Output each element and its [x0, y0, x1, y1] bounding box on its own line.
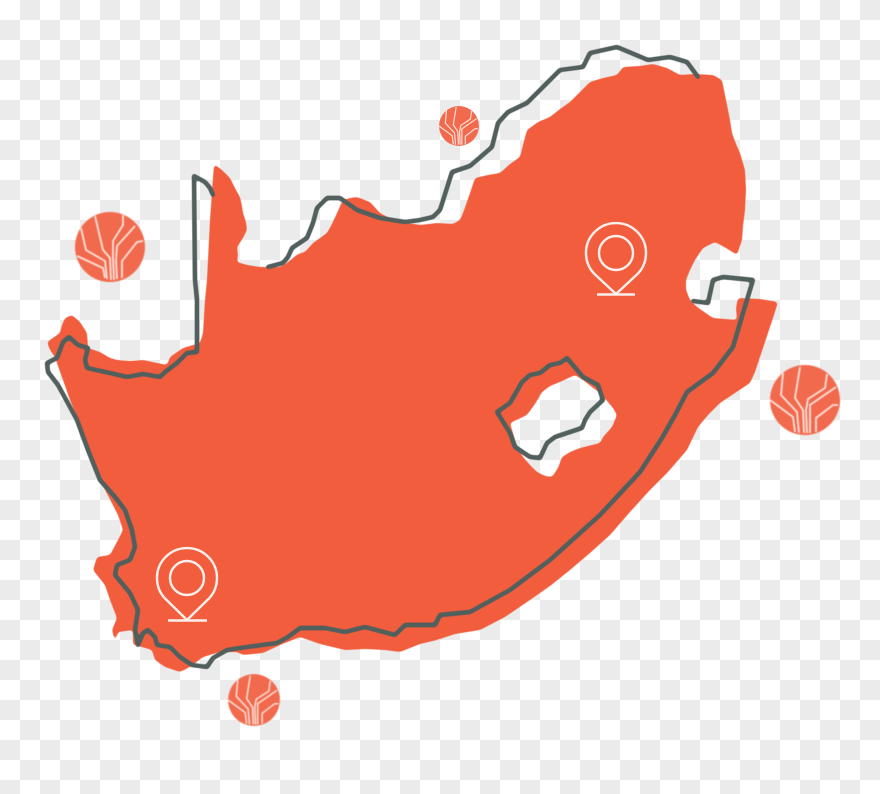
border line: west and south coast [47, 176, 753, 667]
border line: Lesotho [497, 358, 603, 458]
icon: tree circle north [439, 106, 479, 146]
icon: tree circle east [770, 365, 840, 435]
border line: north [268, 47, 698, 267]
icon: tree circle west [75, 212, 145, 282]
icon: location pin north-east [586, 223, 646, 294]
icon: location pin south-west [157, 548, 217, 620]
icon: tree circle south [228, 674, 280, 726]
land mass: South Africa [47, 64, 778, 672]
